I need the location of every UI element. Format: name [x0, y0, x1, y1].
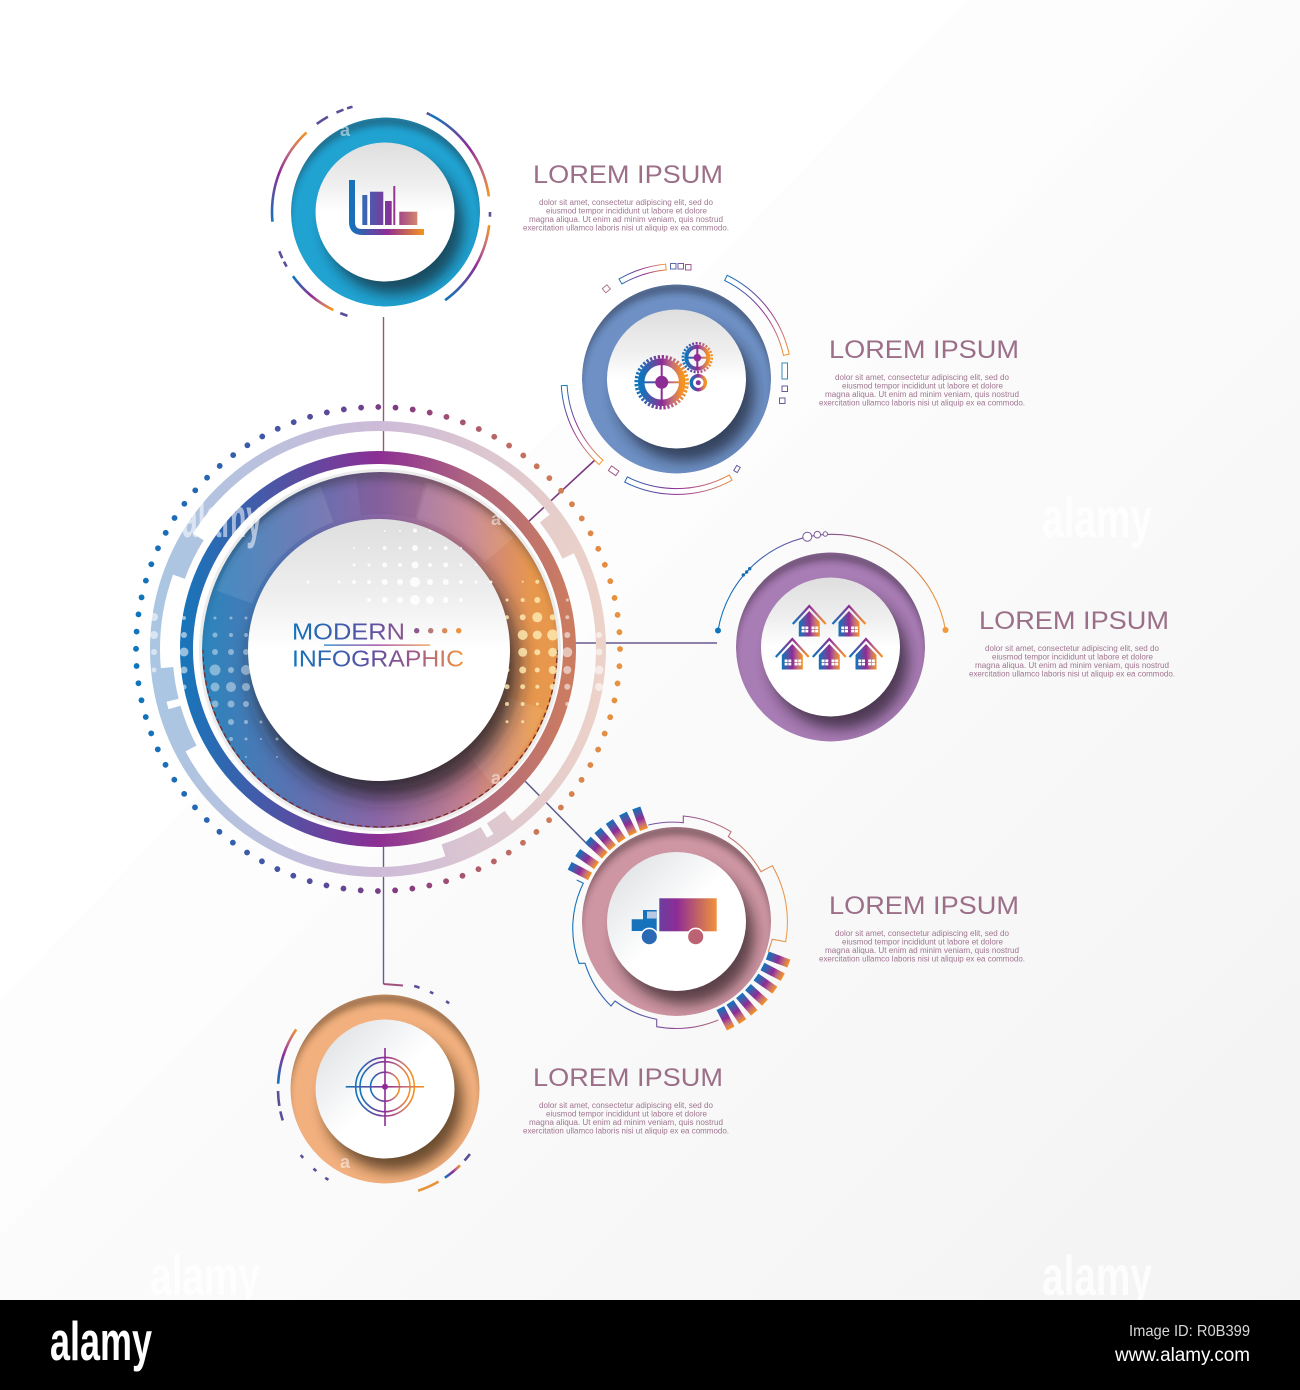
icon: houses	[776, 606, 882, 670]
faint watermarks	[150, 120, 1152, 1307]
heading: LOREM IPSUM	[979, 607, 1169, 635]
text block 4	[819, 892, 1025, 964]
body copy: eiusmod tempor incididunt ut labore et dolore	[546, 1110, 707, 1118]
icon: gears	[636, 343, 712, 408]
body copy	[523, 1101, 729, 1136]
body copy: eiusmod tempor incididunt ut labore et dolore	[842, 382, 1003, 390]
text block 3	[969, 607, 1175, 678]
white disc	[607, 310, 746, 448]
body copy: eiusmod tempor incididunt ut labore et dolore	[546, 206, 707, 216]
faint watermarks: alamy	[182, 486, 262, 549]
body copy	[819, 929, 1025, 964]
panel: item 4 truck	[568, 806, 790, 1032]
body copy: magna aliqua. Ut enim ad minim veniam, quis nostrud	[825, 946, 1019, 955]
icon: target	[346, 1048, 424, 1126]
white centre circle	[248, 519, 510, 781]
pale tech ring with teeth	[155, 426, 601, 872]
body copy: dolor sit amet, consectetur adipiscing elit, sed do	[985, 644, 1160, 653]
blue ring	[291, 118, 480, 306]
faint watermarks: a	[340, 120, 351, 140]
body copy: magna aliqua. Ut enim ad minim veniam, quis nostrud	[529, 215, 723, 224]
footer logo: alamy	[50, 1310, 152, 1372]
body copy: exercitation ullamco laboris nisi ut aliquip ex ea commodo.	[523, 224, 729, 232]
stepped thin line ring	[573, 816, 787, 1028]
website: www.alamy.com	[1114, 1345, 1250, 1366]
image id: Image ID: R0B399	[1129, 1323, 1250, 1340]
body copy: exercitation ullamco laboris nisi ut aliquip ex ea commodo.	[819, 954, 1025, 964]
decorative arcs	[272, 103, 490, 321]
faint watermarks: alamy	[1042, 486, 1152, 549]
connector lines	[384, 317, 717, 986]
heading: LOREM IPSUM	[533, 161, 723, 189]
panel: central modern infographic hub	[136, 407, 620, 891]
halftone dots on the outer ring	[150, 598, 604, 706]
decorative outlined arcs	[564, 266, 789, 492]
heading: LOREM IPSUM	[829, 892, 1019, 920]
body copy: magna aliqua. Ut enim ad minim veniam, quis nostrud	[529, 1118, 723, 1127]
halftone dots in white circle	[306, 528, 492, 605]
body copy	[523, 198, 729, 232]
body copy: dolor sit amet, consectetur adipiscing elit, sed do	[835, 929, 1010, 938]
halftone dots: left	[202, 616, 278, 758]
purple ring	[736, 552, 925, 742]
white disc	[316, 1020, 454, 1158]
faint watermarks: alamy	[1042, 1244, 1152, 1307]
body copy: exercitation ullamco laboris nisi ut aliquip ex ea commodo.	[969, 670, 1175, 678]
heading: LOREM IPSUM	[533, 1064, 723, 1092]
faint watermarks: a	[491, 509, 502, 529]
body copy: eiusmod tempor incididunt ut labore et dolore	[842, 938, 1003, 946]
gradient outer ring	[186, 458, 570, 840]
decorative arcs	[278, 982, 492, 1196]
central title: modern infographic	[292, 618, 464, 672]
body copy: dolor sit amet, consectetur adipiscing elit, sed do	[835, 373, 1010, 382]
radial gradient bars: lower right	[717, 952, 790, 1030]
body copy: exercitation ullamco laboris nisi ut aliquip ex ea commodo.	[523, 1126, 729, 1136]
panel: item 2 gears	[564, 264, 789, 492]
footer bar	[0, 1300, 1300, 1390]
icon: bar chart	[352, 180, 424, 232]
white disc	[761, 578, 900, 716]
body copy: exercitation ullamco laboris nisi ut aliquip ex ea commodo.	[819, 398, 1025, 408]
halftone dots: right	[504, 580, 558, 723]
faint watermarks: a	[340, 1152, 351, 1172]
white disc	[316, 142, 454, 282]
body copy: eiusmod tempor incididunt ut labore et dolore	[992, 652, 1153, 662]
radial gradient bars: upper left	[568, 806, 648, 880]
orange ring	[290, 994, 480, 1184]
rose ring	[582, 827, 771, 1016]
text block 5	[523, 1064, 729, 1136]
body copy: magna aliqua. Ut enim ad minim veniam, quis nostrud	[825, 390, 1019, 399]
panel: item 5 target	[278, 982, 492, 1200]
small outlined squares	[602, 264, 788, 476]
inner gradient disc with shadows	[199, 469, 561, 831]
body copy	[969, 644, 1175, 678]
dotted outer ring	[136, 407, 620, 891]
white disc	[607, 852, 746, 991]
panel: item 3 houses	[715, 531, 948, 758]
text block 1	[523, 161, 729, 232]
faint watermarks: alamy	[150, 1244, 260, 1307]
decorative thin arc with nodes	[715, 531, 948, 634]
body copy: dolor sit amet, consectetur adipiscing elit, sed do	[539, 198, 714, 207]
heading: LOREM IPSUM	[829, 336, 1019, 364]
body copy	[819, 373, 1025, 408]
text block 2	[819, 336, 1025, 408]
panel: item 1 chart	[272, 103, 490, 323]
icon: truck	[632, 898, 717, 945]
body copy: dolor sit amet, consectetur adipiscing elit, sed do	[539, 1101, 714, 1110]
central title: modern infographic: MODERN	[292, 618, 405, 644]
central title: modern infographic: INFOGRAPHIC	[292, 646, 464, 672]
periwinkle ring	[582, 284, 771, 474]
faint watermarks: a	[491, 768, 502, 788]
body copy: magna aliqua. Ut enim ad minim veniam, quis nostrud	[975, 661, 1169, 670]
